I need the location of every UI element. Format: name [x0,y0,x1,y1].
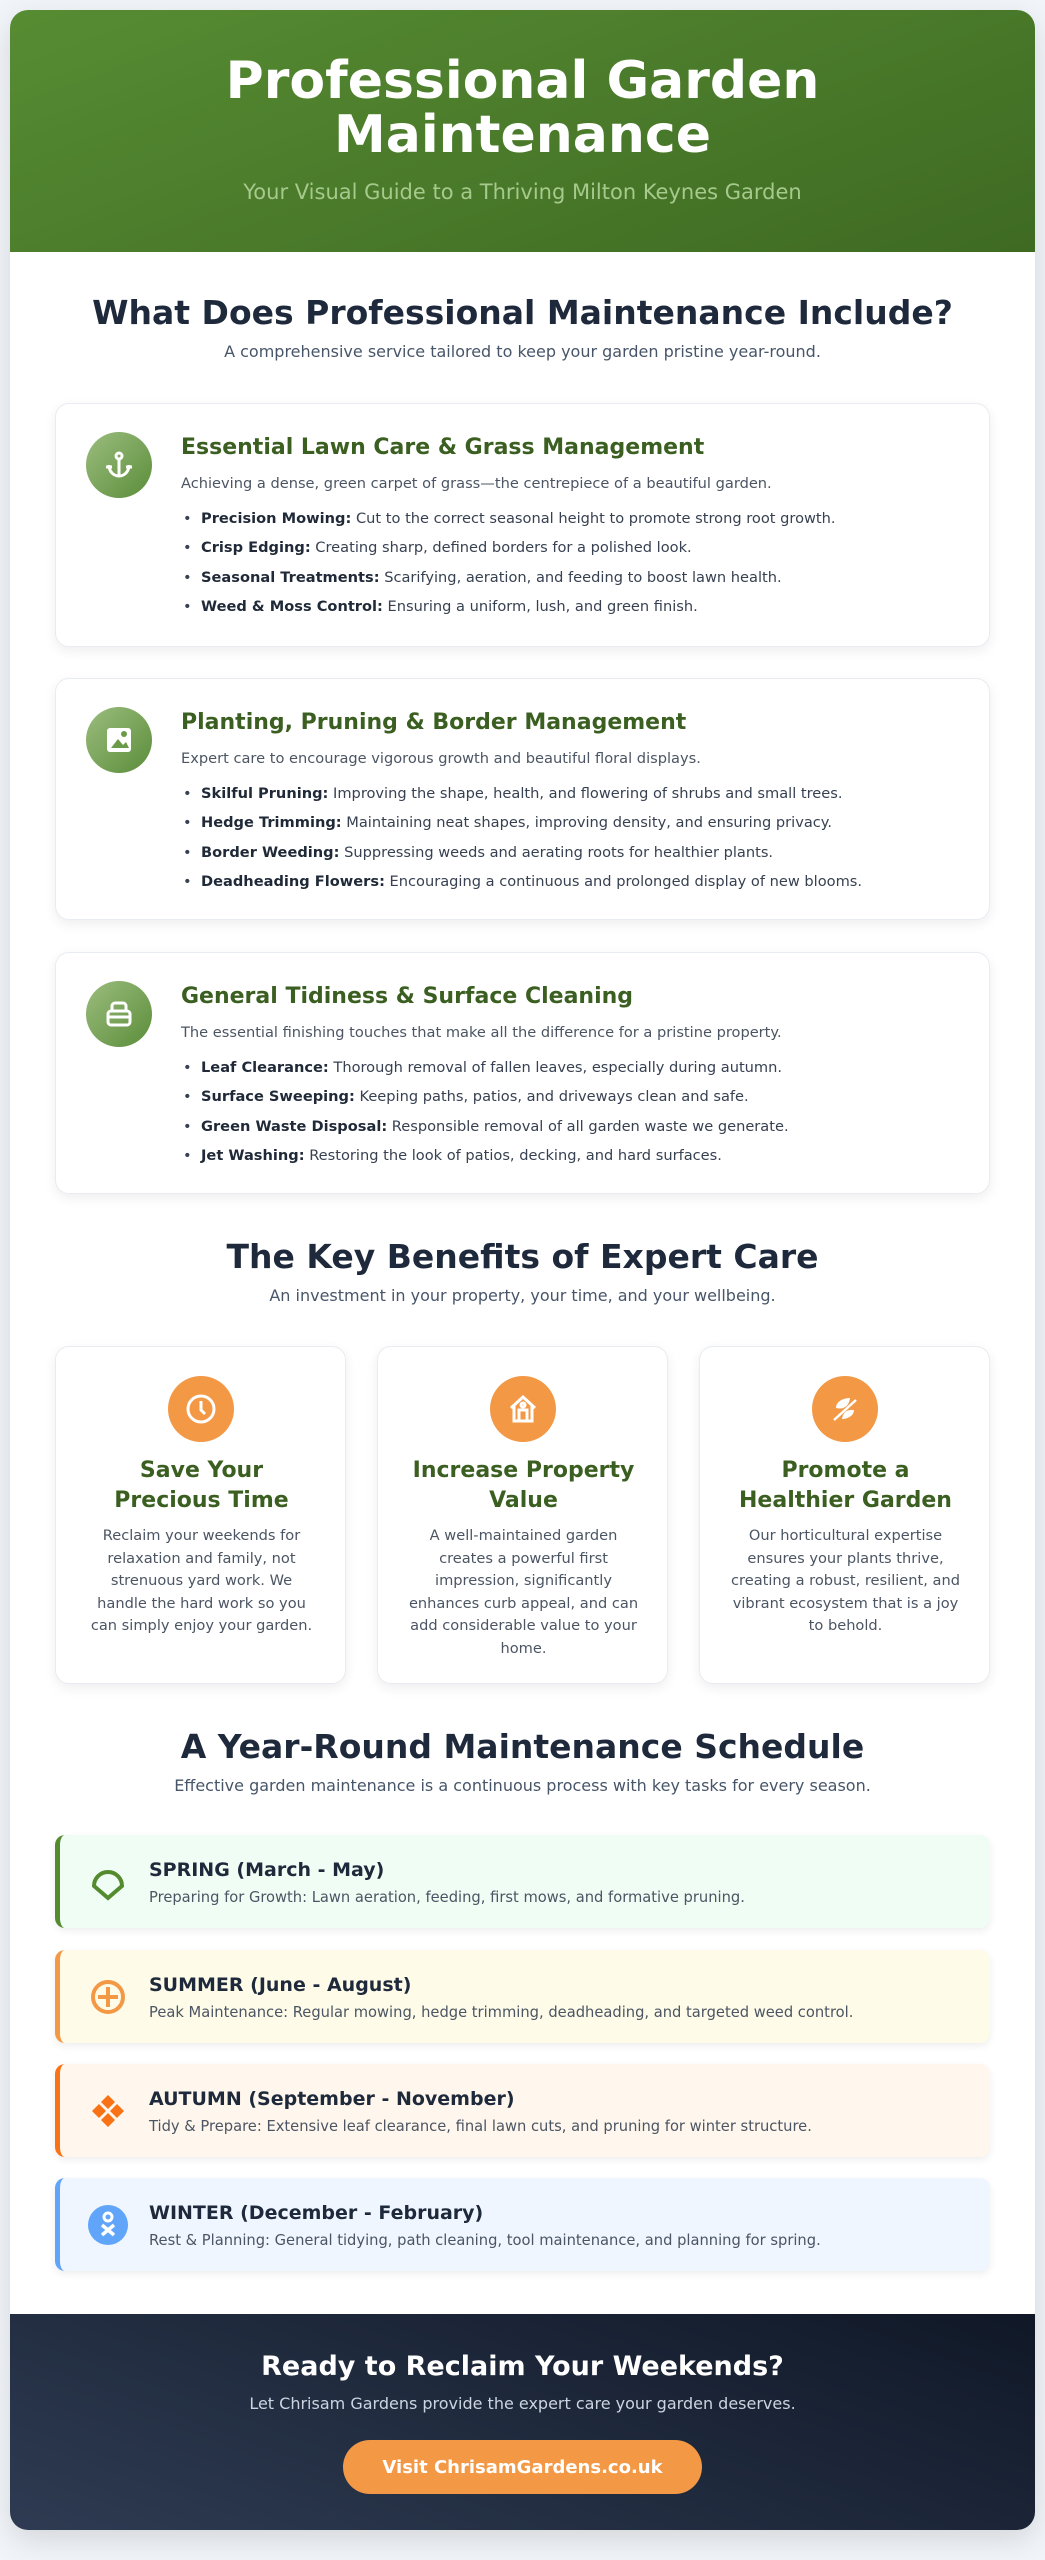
bullet list: Deadheading Flowers: Encouraging a continuous and prolonged display of new blooms. [201,873,862,890]
benefit text: Our horticultural expertise ensures your plants thrive, creating a robust, resilient, and vibrant ecosystem that is a joy to behold. [731,1527,960,1634]
icon: house [490,1376,556,1442]
bullet list [185,1059,789,1164]
button [343,2440,702,2494]
benefit title: Promote a [781,1458,910,1483]
bullet list: Weed & Moss Control: Ensuring a uniform, lush, and green finish. [201,598,698,615]
bullet list: Skilful Pruning: Improving the shape, health, and flowering of shrubs and small trees. [201,785,842,802]
benefit title [114,1458,289,1513]
benefit title: Precious Time [114,1488,289,1513]
benefit title [739,1458,952,1513]
heading: services: What Does Professional Maintenance Include? [92,293,953,332]
panel: benefit healthier [699,1346,990,1684]
season: winter [55,2178,990,2271]
season title: WINTER (December - February) [149,2202,483,2224]
button: Visit ChrisamGardens.co.uk [382,2456,663,2478]
icon: lawn [86,432,152,498]
bullet list: Green Waste Disposal: Responsible removal of all garden waste we generate. [201,1118,789,1135]
bullet list: Leaf Clearance: Thorough removal of fallen leaves, especially during autumn. [201,1059,782,1076]
bullet list: Hedge Trimming: Maintaining neat shapes, improving density, and ensuring privacy. [201,814,832,831]
footer text: Let Chrisam Gardens provide the expert care your garden deserves. [249,2394,796,2413]
panel: benefit time [55,1346,346,1684]
subheading: benefits: An investment in your property, your time, and your wellbeing. [269,1286,776,1305]
bullet list [185,785,862,890]
benefit text: Reclaim your weekends for relaxation and family, not strenuous yard work. We handle the hard work so you can simply enjoy your garden. [91,1527,312,1634]
season text: Preparing for Growth: Lawn aeration, feeding, first mows, and formative pruning. [149,1889,745,1906]
icon: winter [88,2205,128,2245]
footer call to action [10,2314,1035,2530]
subheading: schedule: Effective garden maintenance is a continuous process with key tasks for every season. [174,1776,871,1795]
season: summer [55,1950,990,2043]
heading: schedule: A Year-Round Maintenance Schedule [181,1727,864,1766]
heading: benefits: The Key Benefits of Expert Care [226,1237,819,1276]
panel: planting [55,678,990,920]
icon: planting [86,707,152,773]
bullet list: Crisp Edging: Creating sharp, defined borders for a polished look. [201,539,692,556]
benefit title: Value [489,1488,558,1513]
header banner [10,10,1035,252]
panel: benefit value [377,1346,668,1684]
bullet list: Precision Mowing: Cut to the correct seasonal height to promote strong root growth. [201,510,836,527]
bullet list: Border Weeding: Suppressing weeds and aerating roots for healthier plants. [201,844,773,861]
benefit title: Healthier Garden [739,1488,952,1513]
subtitle: Your Visual Guide to a Thriving Milton Keynes Garden [243,180,802,204]
footer title: Ready to Reclaim Your Weekends? [261,2351,784,2382]
bullet list [185,510,836,615]
card description: The essential finishing touches that make all the difference for a pristine property. [181,1024,782,1041]
icon: cleaning [86,981,152,1047]
panel: lawn care [55,403,990,647]
benefit text: A well-maintained garden creates a powerful first impression, significantly enhances curb appeal, and can add considerable value to your home. [409,1527,638,1656]
season text: Rest & Planning: General tidying, path cleaning, tool maintenance, and planning for spring. [149,2232,821,2249]
bullet list: Surface Sweeping: Keeping paths, patios, and driveways clean and safe. [201,1088,749,1105]
season title: SPRING (March - May) [149,1859,384,1881]
card description: Achieving a dense, green carpet of grass—the centrepiece of a beautiful garden. [181,475,772,492]
benefit title: Increase Property [413,1458,634,1483]
icon: spring [92,1870,124,1900]
season: spring [55,1835,990,1928]
season: autumn [55,2064,990,2157]
benefit title: Save Your [140,1458,263,1483]
bullet list: Seasonal Treatments: Scarifying, aeration, and feeding to boost lawn health. [201,569,782,586]
season title: SUMMER (June - August) [149,1974,411,1996]
title: Professional Garden [226,51,819,111]
card description: Expert care to encourage vigorous growth and beautiful floral displays. [181,750,701,767]
subheading: services: A comprehensive service tailored to keep your garden pristine year-round. [224,342,821,361]
card title: Essential Lawn Care & Grass Management [181,435,704,460]
card title: General Tidiness & Surface Cleaning [181,984,633,1009]
card title: Planting, Pruning & Border Management [181,710,686,735]
bullet list: Jet Washing: Restoring the look of patios, decking, and hard surfaces. [201,1147,722,1164]
season text: Peak Maintenance: Regular mowing, hedge trimming, deadheading, and targeted weed control. [149,2004,853,2021]
icon: autumn [92,2095,124,2127]
title: Maintenance [334,105,711,165]
season title: AUTUMN (September - November) [149,2088,515,2110]
panel: tidiness [55,952,990,1194]
title [226,51,819,165]
icon: summer [91,1980,125,2014]
icon: leaves [812,1376,878,1442]
benefit title [413,1458,634,1513]
season text: Tidy & Prepare: Extensive leaf clearance, final lawn cuts, and pruning for winter structure. [149,2118,812,2135]
icon: clock [168,1376,234,1442]
